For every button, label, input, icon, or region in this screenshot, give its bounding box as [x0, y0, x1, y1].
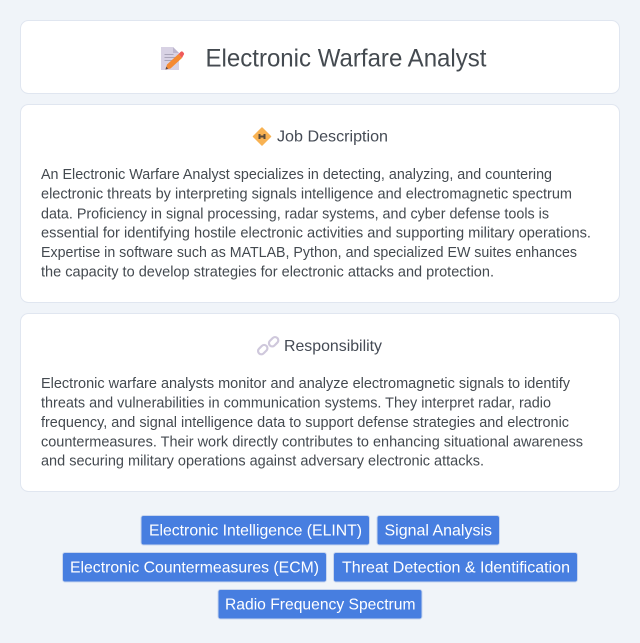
tag: Radio Frequency Spectrum: Radio Frequency Spectrum — [225, 596, 416, 614]
tag: Electronic Intelligence (ELINT): Electronic Intelligence (ELINT) — [149, 522, 362, 540]
text block: responsibility — [41, 376, 583, 470]
icon: chain link — [257, 336, 280, 356]
icon: orange diamond — [254, 128, 270, 145]
panel: responsibility — [20, 314, 620, 492]
text block: job description: electronic threats by interpreting signals intelligence and electromagnetic spectrum — [41, 187, 572, 203]
tag: Signal Analysis: Signal Analysis — [384, 522, 492, 540]
icon: document with pencil — [161, 47, 184, 70]
title: Electronic Warfare Analyst — [206, 44, 487, 72]
text block: job description — [41, 167, 591, 280]
heading: responsibility: Responsibility — [284, 338, 382, 355]
text block: responsibility: frequency, and signal intelligence data to support defense strategies and electronic — [41, 415, 569, 431]
tag: Electronic Intelligence (ELINT) — [141, 516, 370, 545]
tag: Threat Detection & Identification — [334, 552, 578, 582]
text block: responsibility: Electronic warfare analysts monitor and analyze electromagnetic signals to identify — [41, 376, 571, 392]
tag: Threat Detection & Identification: Threat Detection & Identification — [342, 560, 570, 576]
panel: job description — [20, 104, 620, 302]
panel: title card — [20, 20, 620, 94]
text block: job description: data. Proficiency in signal processing, radar systems, and cyber defense tools is — [41, 206, 549, 222]
tag: Electronic Countermeasures (ECM) — [62, 552, 326, 582]
text block: responsibility: and securing military operations against adversary electronic attacks. — [41, 454, 484, 470]
text block: responsibility: countermeasures. Their work directly contributes to enhancing situational awareness — [41, 434, 583, 450]
heading: job description: Job Description — [277, 128, 388, 146]
text block: job description: An Electronic Warfare Analyst specializes in detecting, analyzing, and countering — [41, 167, 552, 183]
text block: job description: Expertise in software such as MATLAB, Python, and specialized EW suites enhances — [41, 245, 577, 261]
tag: Electronic Countermeasures (ECM): Electronic Countermeasures (ECM) — [70, 560, 319, 576]
text block: job description: essential for identifying hostile electronic activities and supporting military operations. — [41, 226, 591, 242]
text block: job description: the capacity to develop strategies for electronic attacks and protection. — [41, 264, 494, 280]
tag: Signal Analysis — [377, 516, 500, 545]
text block: responsibility: threats and vulnerabilities in communication systems. They interpret radar, radio — [41, 395, 551, 411]
tag: Radio Frequency Spectrum — [218, 590, 422, 619]
